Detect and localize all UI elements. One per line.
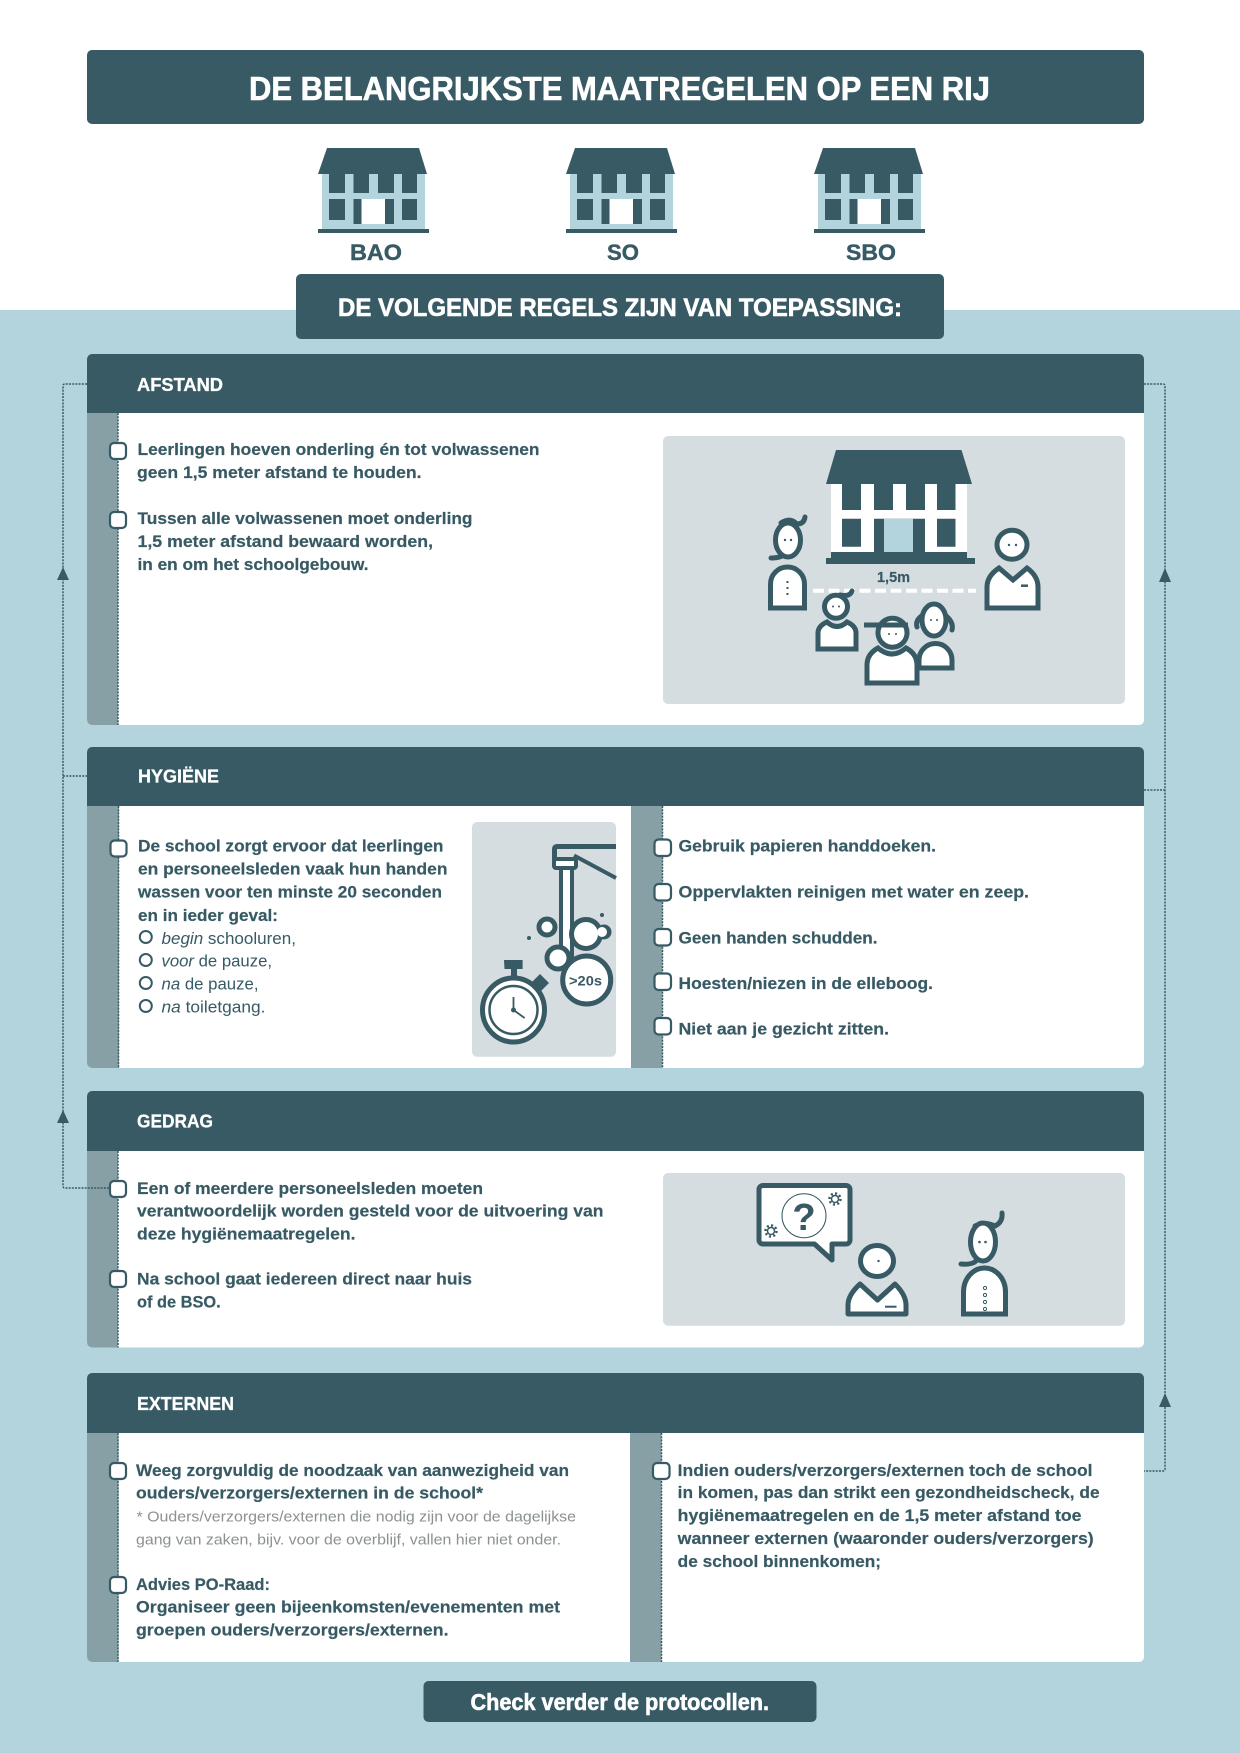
icon: school SO [566, 148, 677, 265]
rule: personeelsleden [110, 1180, 604, 1244]
rule: handdoeken: Gebruik papieren handdoeken. [678, 838, 936, 856]
arrow: right connector [1144, 384, 1171, 1471]
illustration: tap and stopwatch [472, 822, 616, 1057]
icon: bubbles: >20s [569, 973, 602, 989]
panel: afstand [87, 354, 1144, 725]
icon: school SO: SO [607, 240, 639, 265]
rule: gezondheidscheck: in komen, pas dan strikt een gezondheidscheck, de [678, 1484, 1100, 1502]
header: gedrag [87, 1091, 1144, 1151]
button: check protocollen: Check verder de protocollen. [470, 1689, 769, 1715]
header: afstand: AFSTAND [137, 374, 223, 395]
rule: personeelsleden: Een of meerdere personeelsleden moeten [137, 1180, 483, 1198]
header: externen: EXTERNEN [137, 1393, 234, 1414]
subheading [296, 274, 944, 339]
icon: tap [554, 846, 616, 960]
icon: woman [961, 1213, 1006, 1314]
header: hygiene: HYGIËNE [138, 766, 219, 787]
illustration: school and people at distance [663, 436, 1125, 704]
rule: handen wassen: De school zorgt ervoor dat leerlingen [138, 838, 444, 856]
rule: handen wassen: begin schooluren, [162, 930, 296, 948]
icon: child with cap [864, 618, 917, 683]
rule: na school: Na school gaat iedereen direct naar huis [137, 1271, 472, 1289]
panel: externen [87, 1373, 1144, 1662]
header: externen [87, 1373, 1144, 1433]
rule: leerlingen: Leerlingen hoeven onderling én tot volwassenen [138, 441, 540, 459]
icon: man [848, 1246, 906, 1314]
rule: handen wassen [110, 838, 448, 1017]
rule: gezicht: Niet aan je gezicht zitten. [678, 1021, 889, 1039]
rule: gezondheidscheck [653, 1462, 1100, 1571]
rule: handen wassen: en personeelsleden vaak hun handen [138, 861, 448, 879]
rule: handen wassen: en in ieder geval: [138, 907, 278, 925]
icon: speech bubble [759, 1186, 850, 1260]
rule: na school [110, 1271, 472, 1312]
icon: child with pigtails [917, 604, 952, 668]
title: DE BELANGRIJKSTE MAATREGELEN OP EEN RIJ [249, 70, 990, 107]
illustration: question conversation [663, 1173, 1125, 1326]
icon: child with ponytail [818, 591, 856, 649]
rule: advies PO-Raad [110, 1576, 561, 1640]
title [87, 50, 1144, 124]
rule: personeelsleden: deze hygiënemaatregelen. [137, 1226, 356, 1244]
arrow: left connector [57, 384, 110, 1188]
header: hygiene [87, 747, 1144, 806]
rule: handen wassen: wassen voor ten minste 20 seconden [137, 884, 442, 902]
icon: school SBO: SBO [846, 240, 896, 265]
header: afstand [87, 354, 1144, 413]
rule: gezondheidscheck: wanneer externen (waaronder ouders/verzorgers) [677, 1530, 1094, 1548]
rule: volwassenen: in en om het schoolgebouw. [138, 556, 368, 574]
footnote [136, 1510, 576, 1548]
rule: volwassenen: Tussen alle volwassenen moet onderling [138, 510, 472, 528]
icon: speech bubble: ? [792, 1197, 816, 1239]
rule: volwassenen [110, 510, 472, 574]
rule: leerlingen: geen 1,5 meter afstand te houden. [137, 464, 422, 482]
rule: gezondheidscheck: de school binnenkomen; [678, 1553, 881, 1571]
subheading: DE VOLGENDE REGELS ZIJN VAN TOEPASSING: [338, 294, 902, 322]
button: check protocollen [424, 1681, 816, 1722]
header: gedrag: GEDRAG [137, 1111, 213, 1132]
panel: hygiene [87, 747, 1144, 1068]
footnote: gang van zaken, bijv. voor de overblijf, vallen hier niet onder. [136, 1532, 561, 1548]
rule: advies PO-Raad: Organiseer geen bijeenkomsten/evenementen met [136, 1599, 561, 1617]
icon: school SBO [814, 148, 925, 265]
icon: stopwatch [482, 960, 549, 1042]
rule: handen schudden: Geen handen schudden. [678, 929, 878, 947]
rule: weeg zorgvuldig [110, 1462, 576, 1548]
rule: hoesten: Hoesten/niezen in de elleboog. [678, 975, 933, 993]
icon: woman [770, 517, 805, 608]
rule: advies PO-Raad: groepen ouders/verzorgers/externen. [136, 1622, 448, 1640]
rule: na school: of de BSO. [137, 1294, 221, 1312]
rule: oppervlakten: Oppervlakten reinigen met water en zeep. [678, 884, 1029, 902]
icon: school BAO: BAO [350, 240, 402, 265]
illustration: school and people at distance: 1,5m [877, 569, 910, 586]
rule: gezondheidscheck: Indien ouders/verzorgers/externen toch de school [678, 1462, 1092, 1480]
rule: leerlingen [110, 441, 540, 482]
icon: bubbles [527, 913, 611, 1004]
rule: advies PO-Raad: Advies PO-Raad: [136, 1576, 270, 1594]
rule: weeg zorgvuldig: Weeg zorgvuldig de noodzaak van aanwezigheid van [136, 1462, 569, 1480]
panel: gedrag [87, 1091, 1144, 1348]
rule: volwassenen: 1,5 meter afstand bewaard worden, [138, 533, 433, 551]
icon: man [987, 530, 1038, 608]
rule: handen wassen: na de pauze, [162, 976, 258, 994]
icon: school BAO [318, 148, 429, 265]
rule: personeelsleden: verantwoordelijk worden gesteld voor de uitvoering van [137, 1203, 604, 1221]
rule: weeg zorgvuldig: ouders/verzorgers/externen in de school* [136, 1484, 484, 1502]
footnote: * Ouders/verzorgers/externen die nodig zijn voor de dagelijkse [136, 1510, 576, 1526]
rule: handen wassen: na toiletgang. [162, 999, 266, 1017]
rule: handen wassen: voor de pauze, [162, 953, 272, 971]
rule: gezondheidscheck: hygiënemaatregelen en de 1,5 meter afstand toe [678, 1507, 1082, 1525]
